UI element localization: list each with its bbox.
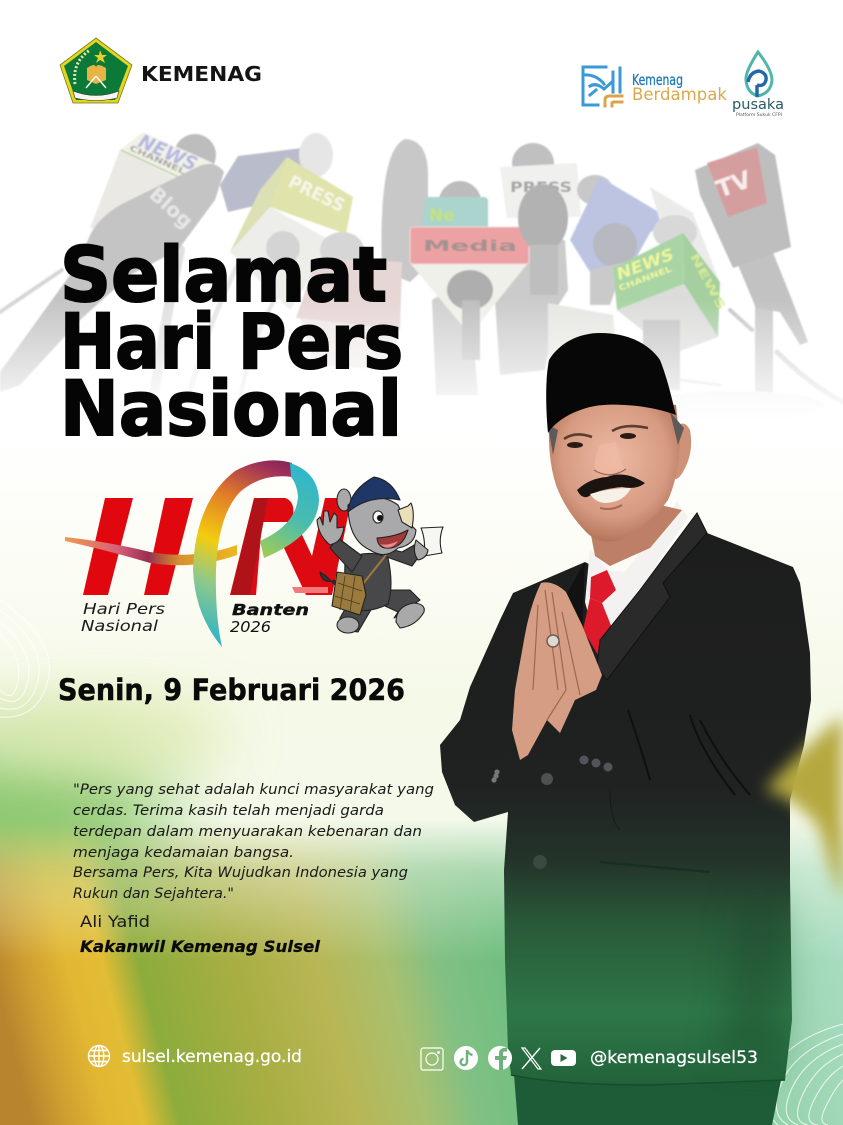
quote: menjaga kedamaian bangsa. [73, 845, 294, 861]
mic: NEWS CHANNEL green [613, 215, 728, 390]
mic: PRESS white: PRESS [510, 180, 572, 196]
tail [320, 572, 340, 590]
peci cap [546, 333, 676, 433]
mic: dark foam centre [495, 240, 568, 375]
text: Kemenag: Kemenag [632, 71, 683, 89]
letter R and N in red [230, 498, 350, 595]
pocket [600, 862, 710, 872]
mic: silver head [299, 133, 333, 177]
stands and cables [0, 250, 843, 420]
title: Selamat [60, 230, 387, 319]
quote [73, 782, 434, 902]
hem [511, 1075, 785, 1085]
title: Nasional [60, 364, 402, 453]
date: Senin, 9 Februari 2026 [58, 673, 405, 707]
right arm [384, 544, 422, 566]
logo: Kemenag Berdampak [583, 67, 727, 106]
icon: globe [88, 1046, 110, 1066]
eye and mouth [373, 511, 383, 523]
necktie [583, 570, 616, 655]
waving hand [317, 511, 344, 545]
mic: NEWS CHANNEL green: NEWS [614, 244, 676, 284]
ribbon: rainbow arc [193, 460, 292, 647]
quote: cerdas. Terima kasih telah menjadi garda [73, 803, 384, 819]
shirt collar [585, 502, 688, 662]
legs [340, 600, 372, 632]
mic: Blog: Blog [145, 182, 198, 233]
gold gradient blob [765, 715, 843, 900]
background gradient [0, 534, 843, 1125]
eyebrows and eyes [564, 426, 648, 439]
text: pusaka: pusaka [732, 97, 784, 113]
portrait: man with peci in black suit [440, 333, 811, 1125]
title [60, 230, 403, 453]
icon: facebook [488, 1046, 512, 1070]
quote: Rukun dan Sejahtera." [73, 886, 234, 902]
stand base shadow [645, 391, 825, 421]
mic: white rear cube [650, 187, 720, 283]
icon: instagram [421, 1048, 443, 1070]
mic: Ne teal box [421, 197, 488, 228]
mic: blue [570, 175, 667, 305]
logo: Pusaka [732, 52, 784, 117]
icon: blue and gold arches [583, 67, 622, 106]
text: social handle: @kemenagsulsel53 [590, 1048, 758, 1067]
label: Banten 2026: 2026 [230, 618, 271, 636]
suit shading [720, 900, 780, 1060]
decorative wave lines [0, 600, 843, 1125]
mic: Blog [0, 164, 224, 392]
brand name: KEMENAG: KEMENAG [141, 62, 262, 86]
mic: News Channel cube [90, 130, 213, 240]
label: Hari Pers Nasional: Nasional [81, 617, 159, 635]
body jacket [344, 553, 391, 611]
label: Banten 2026: Banten [232, 601, 309, 619]
icon: X [522, 1048, 541, 1069]
mic: PRESS white [500, 143, 581, 295]
ear [337, 489, 351, 511]
logo: Kemenag emblem [60, 38, 132, 103]
forearm sleeve [558, 630, 806, 830]
ribbon: horizontal [65, 537, 237, 565]
mic: foam behind Media [438, 181, 482, 229]
mic: TV: TV [712, 165, 755, 204]
text: Berdampak: Berdampak [632, 85, 727, 104]
bag strap [358, 555, 386, 590]
speaker role: Kakanwil Kemenag Sulsel [80, 937, 321, 956]
label: Banten 2026 [230, 601, 309, 636]
hands pressed together [512, 582, 602, 760]
footer: website [88, 1046, 302, 1066]
letter H in red [83, 498, 193, 595]
mic: Media [410, 227, 529, 360]
mic: News Channel cube: NEWS [135, 130, 201, 176]
mic: round head behind News [174, 134, 216, 176]
head: face [548, 398, 691, 566]
mic: Media: Media [423, 237, 517, 255]
sleeve buttons [491, 756, 612, 869]
quote: terdepan dalam menyuarakan kebenaran dan [73, 824, 422, 840]
side hair [548, 412, 684, 455]
quote: Bersama Pers, Kita Wujudkan Indonesia yang [73, 865, 408, 881]
speaker name: Ali Yafid [80, 912, 150, 931]
mic: NEWS CHANNEL green: NEWS [687, 251, 728, 312]
mic: News Channel cube: CHANNEL [128, 144, 187, 176]
title: Hari Pers [60, 297, 403, 386]
mic: PRESS cube [230, 157, 353, 310]
quote: "Pers yang sehat adalah kunci masyarakat yang [73, 782, 434, 798]
background microphones photo [0, 130, 843, 425]
mic: pink base [296, 232, 402, 370]
mascot: rhino [317, 477, 443, 633]
trousers [514, 1075, 782, 1125]
logo: HPN Banten 2026 [65, 460, 443, 647]
paper [421, 527, 443, 556]
lapel right [597, 513, 707, 680]
left arm [330, 538, 362, 572]
mic: Ne teal box: Ne [429, 206, 455, 226]
mic: NEWS CHANNEL green: CHANNEL [617, 264, 673, 293]
label: Hari Pers Nasional [81, 600, 165, 635]
icon: tiktok [454, 1046, 478, 1070]
smile [590, 488, 631, 503]
mic: PRESS cube: PRESS [285, 172, 348, 217]
icon: drop [746, 52, 772, 96]
text: tiny tagline: Platform Sukuk CFPI [736, 112, 782, 117]
footer: social media [421, 1046, 758, 1070]
body: suit [440, 513, 811, 1085]
mic: tall foam [381, 139, 428, 282]
horn [398, 503, 413, 528]
mic: BLC box [548, 303, 618, 372]
fade to white [0, 300, 843, 425]
mic: TV [695, 143, 808, 345]
bag [332, 572, 366, 615]
mic: dark foam left [432, 295, 478, 395]
cap [348, 477, 400, 512]
nose [595, 442, 624, 476]
lapel left [560, 562, 590, 660]
moustache [577, 475, 645, 497]
ribbon: teal curl [260, 463, 319, 558]
head [348, 498, 416, 555]
label: Hari Pers Nasional: Hari Pers [83, 600, 165, 618]
text: website url: sulsel.kemenag.go.id [122, 1047, 302, 1066]
mic: blue foam head [220, 148, 303, 212]
icon: youtube [551, 1050, 576, 1066]
